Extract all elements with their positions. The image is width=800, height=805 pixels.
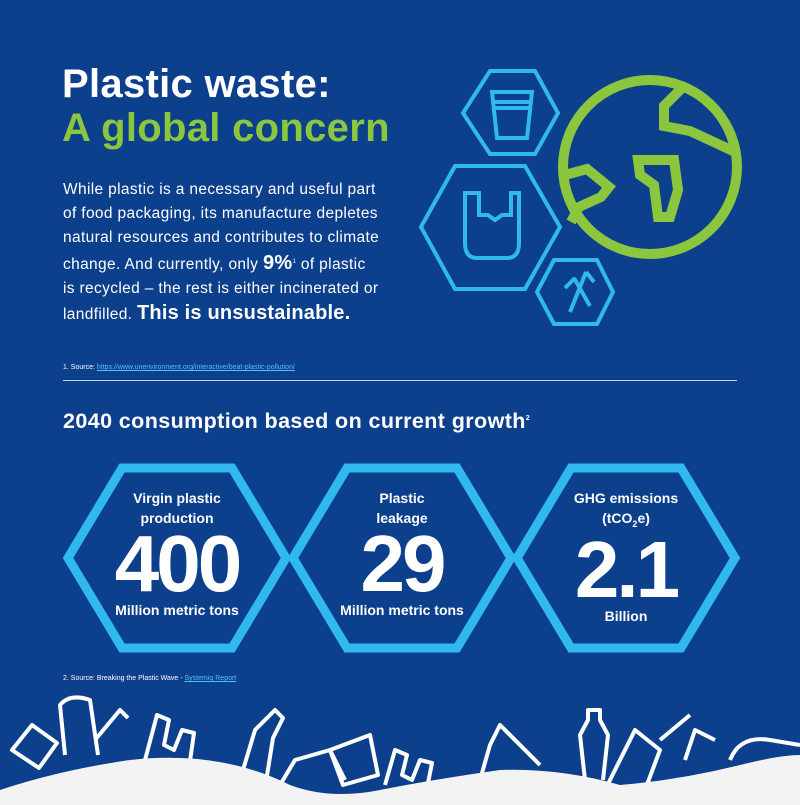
stat: leakage: Million metric tons — [340, 602, 464, 618]
icon: bag hexagon — [421, 166, 560, 289]
stat: GHG: Billion — [605, 608, 647, 624]
stat hexagons — [62, 464, 740, 652]
stat: virgin plastic: Million metric tons — [115, 602, 239, 618]
stat: leakage: 29 — [360, 519, 443, 608]
stat: virgin plastic — [115, 490, 239, 618]
intro text: of food packaging, its manufacture depletes — [63, 205, 378, 222]
icon: cup hexagon — [463, 71, 558, 154]
white ground — [0, 755, 800, 805]
stat: GHG: (tCO2e) — [602, 510, 650, 529]
title: Plastic waste: — [62, 62, 331, 106]
stat: GHG: GHG emissions — [574, 490, 678, 506]
intro text: landfilled. This is unsustainable. — [63, 302, 350, 324]
stat: leakage — [340, 490, 464, 618]
title: A global concern — [62, 106, 390, 150]
footnote 2: 2. Source: Breaking the Plastic Wave - Systemiq Report — [63, 675, 236, 682]
stat: leakage: leakage — [376, 510, 428, 526]
section heading: 2040 consumption based on current growth2 — [63, 409, 530, 433]
stat: leakage: Plastic — [379, 490, 425, 506]
intro text — [63, 181, 379, 324]
icon: globe — [563, 80, 737, 254]
title — [62, 62, 390, 150]
stat: virgin plastic: Virgin plastic — [133, 490, 221, 506]
footnote 1: 1. Source: https://www.unenvironment.org/interactive/beat-plastic-pollution/ — [63, 364, 295, 371]
stat: virgin plastic: 400 — [115, 519, 239, 608]
intro text: While plastic is a necessary and useful part — [63, 181, 376, 198]
intro text: is recycled – the rest is either incinerated or — [63, 280, 378, 297]
icons: plastic hexagons and globe — [418, 69, 742, 326]
stat: GHG — [574, 490, 678, 624]
waste pile illustration — [0, 695, 800, 805]
stat: GHG: 2.1 — [575, 525, 677, 614]
intro text: change. And currently, only 9%1 of plastic — [63, 252, 366, 274]
icon: straw hexagon — [537, 260, 613, 324]
stat: virgin plastic: production — [140, 510, 214, 526]
intro text: natural resources and contributes to climate — [63, 229, 379, 246]
